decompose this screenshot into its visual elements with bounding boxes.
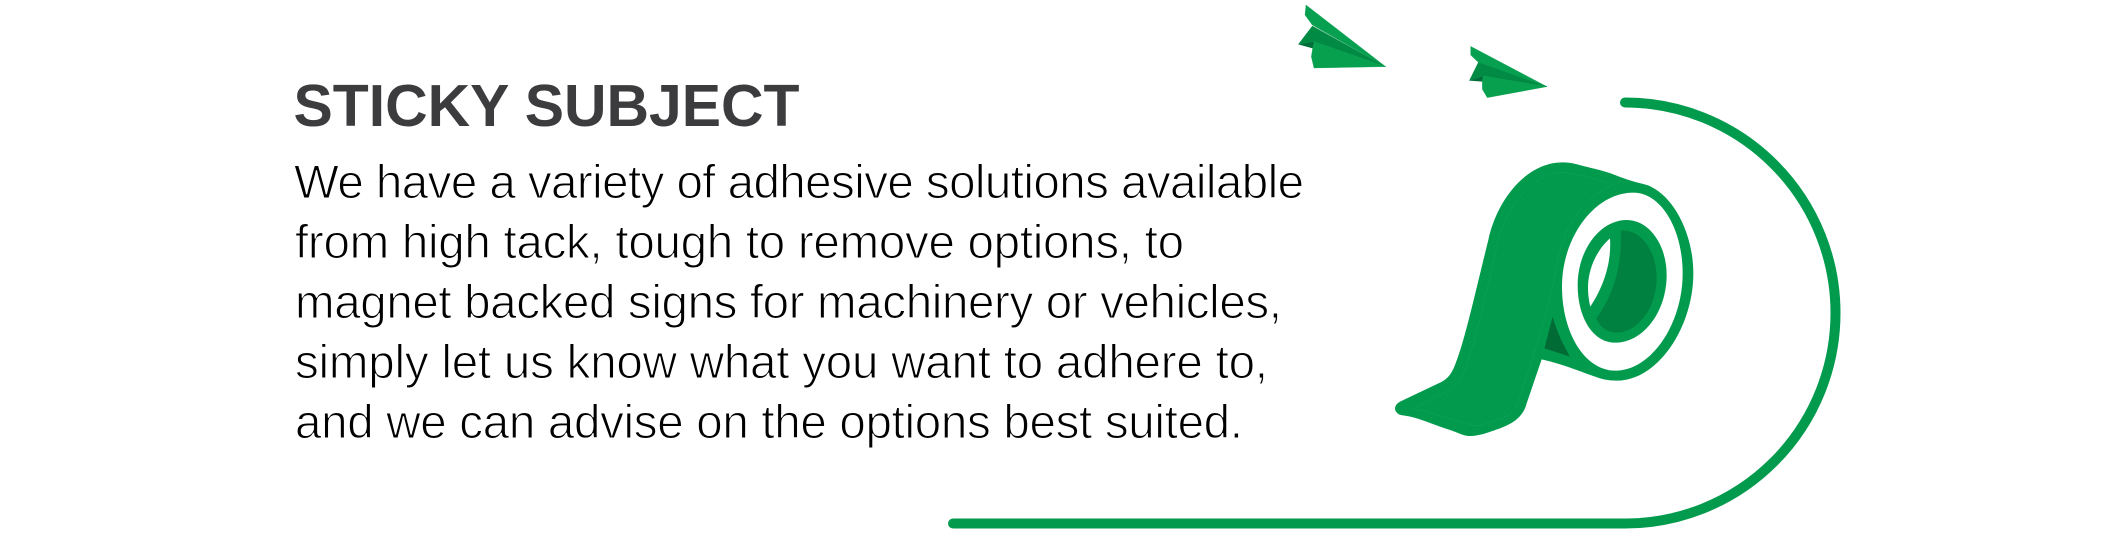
body text block: and we can advise on the options best suited. <box>295 396 1243 449</box>
title: STICKY SUBJECT <box>294 72 800 139</box>
icon: roll of tape <box>1395 162 1693 436</box>
body text block: magnet backed signs for machinery or vehicles, <box>295 276 1282 329</box>
body text block: from high tack, tough to remove options, to <box>295 216 1184 269</box>
icon: paper plane right <box>1469 46 1547 98</box>
body text block <box>294 156 1304 449</box>
icon: paper plane left <box>1298 5 1386 68</box>
body text block: We have a variety of adhesive solutions available <box>294 156 1304 209</box>
body text block: simply let us know what you want to adhere to, <box>295 336 1268 389</box>
curved green line <box>953 102 1836 524</box>
